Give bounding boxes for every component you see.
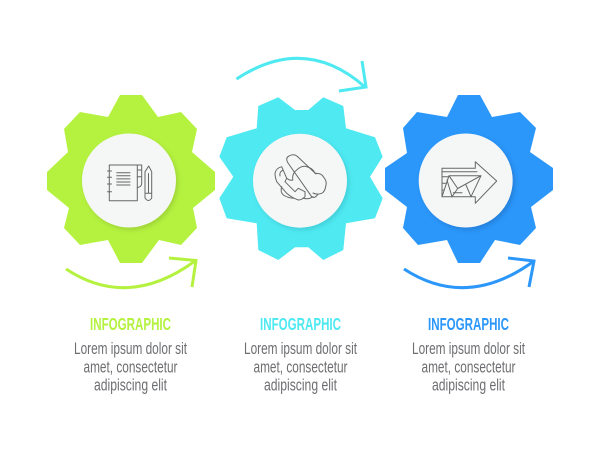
icon: notebook and pencil [108, 165, 152, 201]
arrow: cyan curved [236, 58, 366, 91]
circle: cyan gear centre [253, 134, 347, 228]
panel: step 3 blue gear [385, 95, 553, 263]
text block: step 2 [244, 314, 357, 394]
panel: step 1 green gear [47, 95, 215, 263]
icon: phone and cloud [275, 155, 326, 200]
body: step 2: Lorem ipsum dolor sit [244, 339, 357, 358]
body: step 1 [74, 339, 187, 394]
heading: step 3: INFOGRAPHIC [428, 314, 509, 334]
body: step 3: adipiscing elit [432, 376, 505, 394]
icon: envelope with arrow [442, 162, 497, 203]
body: step 1: adipiscing elit [94, 376, 167, 394]
body: step 2 [244, 339, 357, 394]
heading: step 1: INFOGRAPHIC [90, 314, 171, 334]
body: step 3 [412, 339, 525, 394]
text block: step 1 [74, 314, 187, 394]
body: step 1: amet, consectetur [84, 357, 178, 376]
text block: step 3 [412, 314, 525, 394]
gear: blue [385, 95, 553, 263]
circle: green gear centre [82, 134, 176, 228]
gear: green [47, 95, 215, 263]
heading: step 2: INFOGRAPHIC [260, 314, 341, 334]
arrow: green curved [66, 258, 196, 288]
circle: blue gear centre [419, 134, 513, 228]
arrow: blue curved [404, 258, 534, 288]
gear: cyan [219, 97, 383, 260]
body: step 3: amet, consectetur [422, 357, 516, 376]
body: step 2: adipiscing elit [264, 376, 337, 394]
body: step 3: Lorem ipsum dolor sit [412, 339, 525, 358]
body: step 1: Lorem ipsum dolor sit [74, 339, 187, 358]
panel: step 2 cyan gear [219, 97, 383, 260]
body: step 2: amet, consectetur [254, 357, 348, 376]
